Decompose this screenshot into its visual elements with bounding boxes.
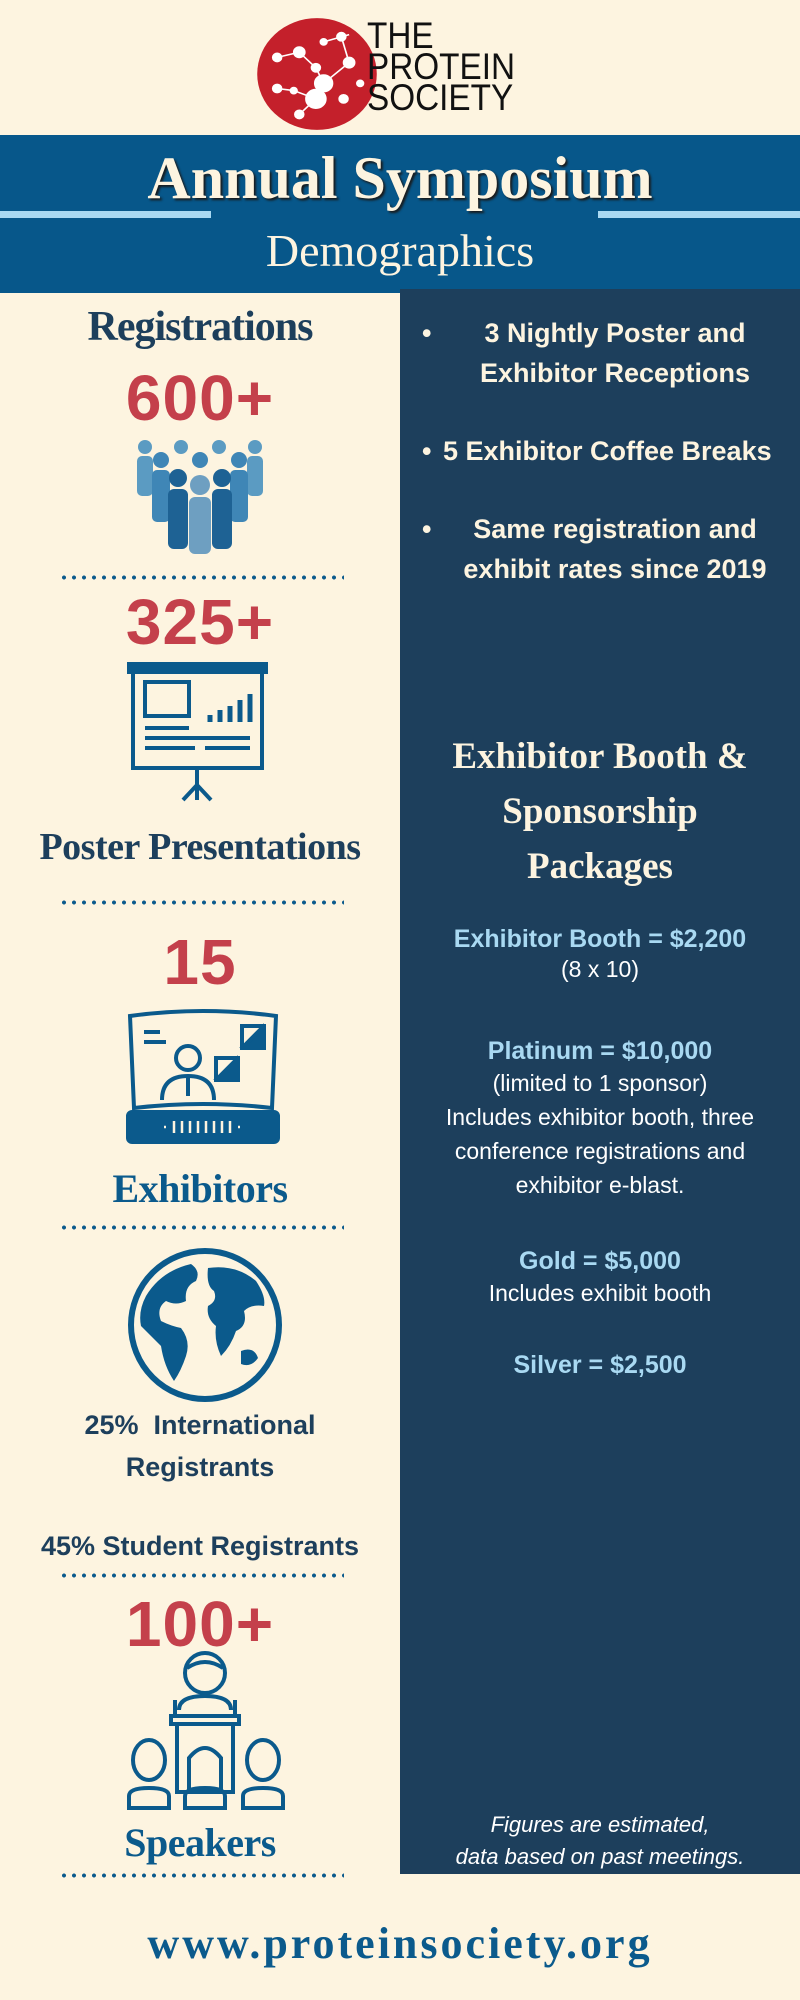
- icon: people: [137, 440, 263, 554]
- price list: Exhibitor Booth = $2,200: [454, 925, 746, 953]
- bullet list: •: [422, 514, 431, 544]
- stat: posters: 325+: [126, 586, 274, 658]
- footer url: www.proteinsociety.org: [147, 1919, 653, 1968]
- footnote: data based on past meetings.: [456, 1844, 744, 1869]
- heading: packages: Exhibitor Booth &: [452, 736, 748, 777]
- title band: [0, 135, 800, 293]
- price list: Platinum = $10,000: [488, 1037, 712, 1065]
- price list: [446, 925, 754, 1379]
- price list: Includes exhibit booth: [489, 1280, 711, 1306]
- price list: exhibitor e-blast.: [516, 1172, 684, 1198]
- bullet list: exhibit rates since 2019: [463, 554, 767, 584]
- price list: (8 x 10): [561, 956, 639, 982]
- logo: SOCIETY: [367, 77, 513, 118]
- icon: speaker podium: [127, 1651, 285, 1810]
- stat: international: Registrants: [126, 1452, 274, 1482]
- price list: conference registrations and: [455, 1138, 745, 1164]
- stat: registrations: 600+: [126, 362, 274, 434]
- icon: globe: [128, 1248, 282, 1402]
- stat: registrations: [88, 304, 312, 554]
- bullet list: 3 Nightly Poster and: [484, 318, 746, 348]
- stat: exhibitors: 15: [163, 926, 237, 998]
- icon: poster board: [127, 662, 268, 802]
- stat: exhibitors: Exhibitors: [112, 1166, 288, 1211]
- subtitle: Demographics: [266, 225, 534, 276]
- stat: students: 45% Student Registrants: [41, 1531, 359, 1561]
- footnote: [456, 1812, 744, 1869]
- price list: Silver = $2,500: [513, 1351, 687, 1379]
- logo: THE: [367, 15, 434, 56]
- stat: speakers: [124, 1588, 285, 1865]
- logo: PROTEIN: [367, 46, 515, 87]
- bullet list: •: [422, 436, 431, 466]
- stat: posters: Poster Presentations: [39, 826, 361, 868]
- bullet list: Exhibitor Receptions: [480, 358, 750, 388]
- stat: exhibitors: [112, 926, 288, 1211]
- icon: exhibitor booth: [126, 1009, 280, 1144]
- price list: Includes exhibitor booth, three: [446, 1104, 754, 1130]
- stat: speakers: 100+: [126, 1588, 274, 1660]
- bullet list: Same registration and: [473, 514, 757, 544]
- heading: packages: Packages: [527, 846, 673, 887]
- price list: (limited to 1 sponsor): [493, 1070, 707, 1096]
- stat: speakers: Speakers: [124, 1820, 276, 1865]
- price list: Gold = $5,000: [519, 1247, 681, 1275]
- heading: packages: [452, 736, 748, 887]
- bullet list: [422, 318, 772, 584]
- bullet list: 5 Exhibitor Coffee Breaks: [443, 436, 772, 466]
- footnote: Figures are estimated,: [491, 1812, 709, 1837]
- stat: registrations: Registrations: [88, 304, 312, 350]
- stat: posters: [39, 586, 361, 868]
- logo: [257, 15, 515, 130]
- bullet list: •: [422, 318, 431, 348]
- heading: packages: Sponsorship: [502, 791, 698, 832]
- panel: exhibitor info: [400, 289, 800, 1874]
- stat: international: [84, 1248, 316, 1482]
- title: Annual Symposium: [147, 145, 653, 211]
- stat: international: 25% International: [84, 1410, 316, 1440]
